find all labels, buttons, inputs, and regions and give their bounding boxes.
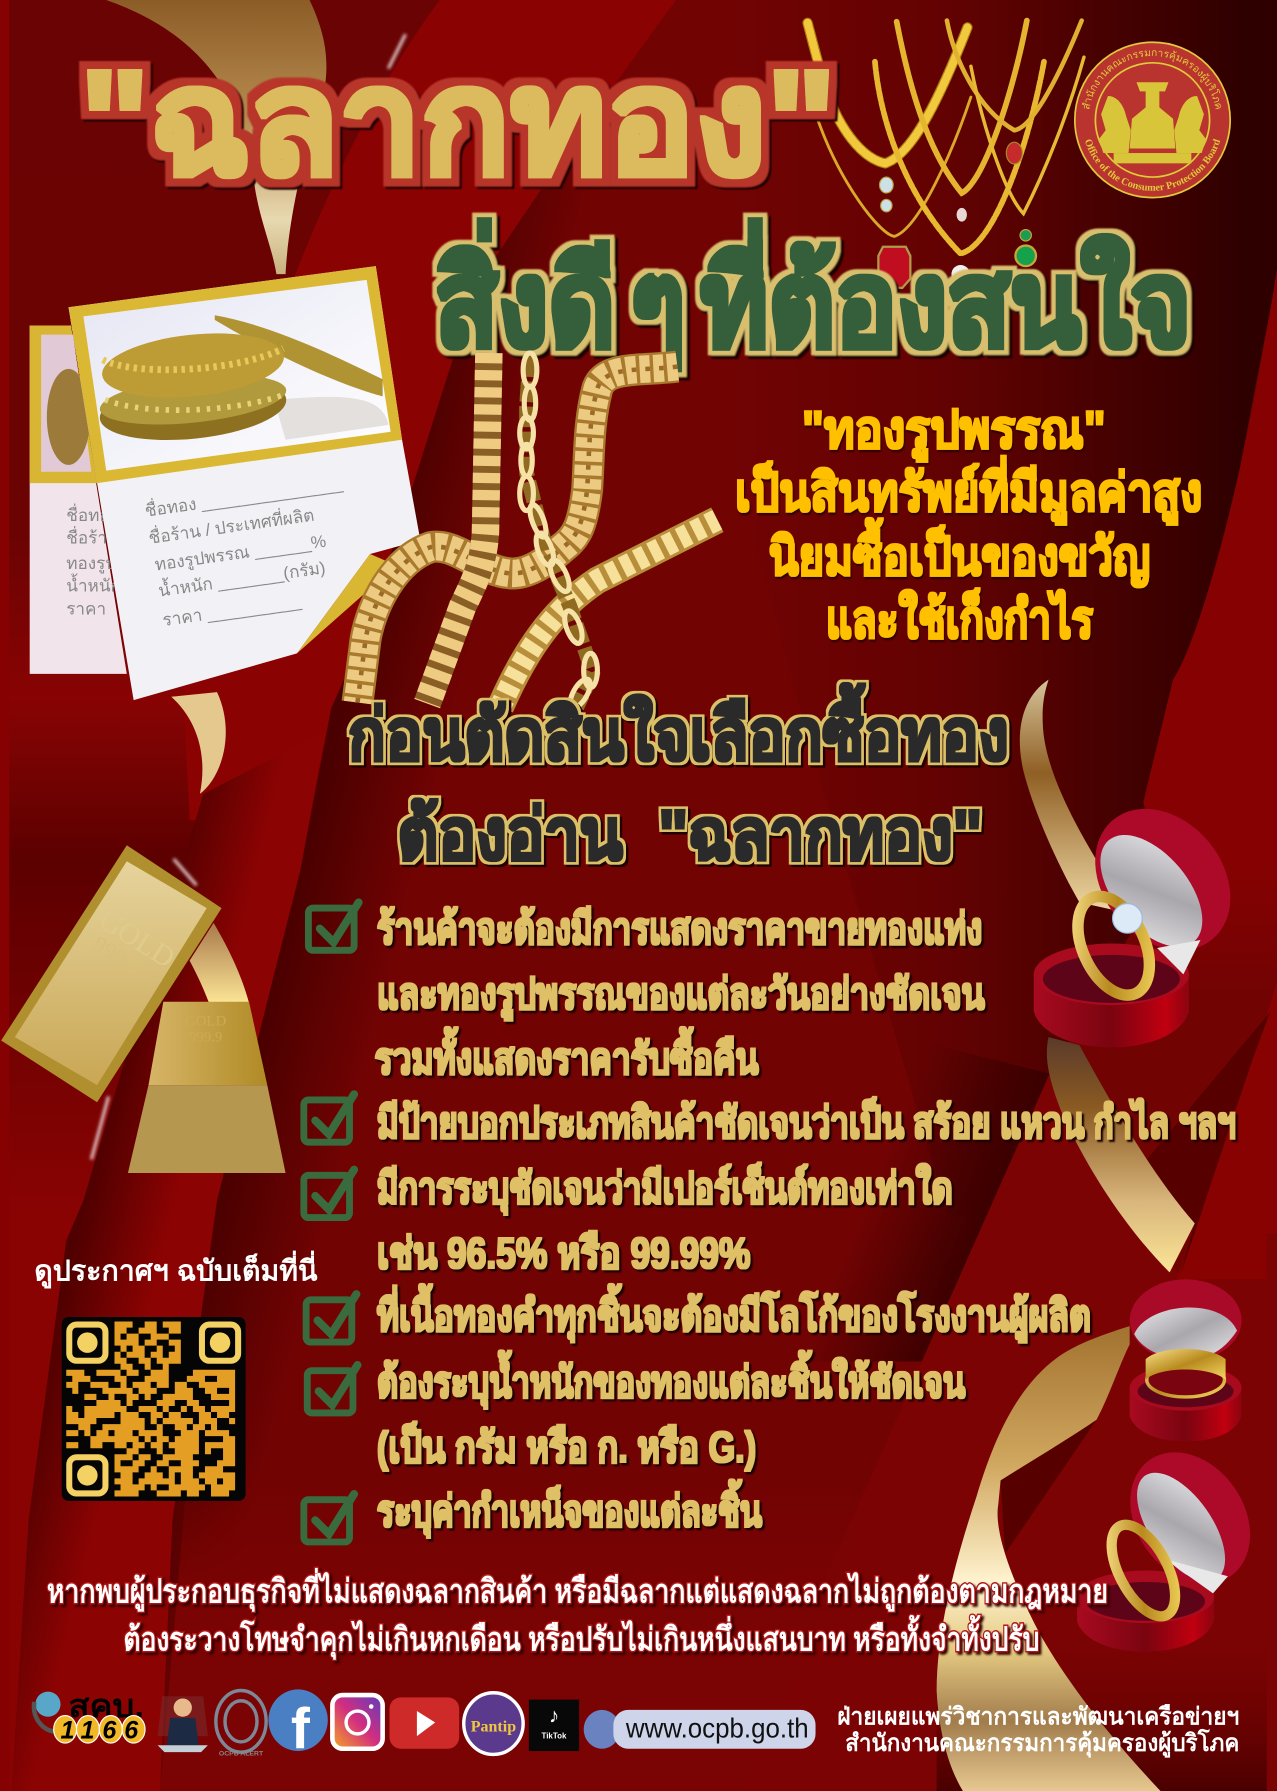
- logo: Facebook: f: [291, 1698, 311, 1762]
- logo: TikTok: [529, 1700, 579, 1751]
- form text: ชื่อร้าน / ประเทศที่ผลิต: [147, 503, 315, 548]
- check item 1: [308, 902, 359, 950]
- form text: ชื่อทอง _______________: [143, 471, 344, 521]
- info text: gold jewellery: นิยมซื้อเป็นของขวัญ: [769, 518, 1150, 588]
- necklace: pearl: [897, 21, 1027, 222]
- QR code: [62, 1317, 246, 1501]
- gold bar: standing: GOLD: [185, 1014, 226, 1030]
- form text: ทองรูปพรรณ ______%: [153, 531, 327, 576]
- QR caption: ดูประกาศฯ ฉบับเต็มที่นี่: [34, 1250, 318, 1288]
- logo: Pantip: [464, 1693, 523, 1754]
- chain: twisted rope: [427, 353, 489, 704]
- seal: consumer protection board: สำนักงานคณะกรรมการคุ้มครองผู้บริโภค: [1082, 50, 1221, 110]
- ribbon: under document: [171, 692, 226, 794]
- gold bar: tilted: GOLD: [93, 904, 180, 975]
- logo: hotline 1166: 1166: [61, 1716, 139, 1744]
- check item 2: [304, 1094, 354, 1142]
- form text: [143, 471, 360, 630]
- check item 5: [307, 1365, 358, 1413]
- document: front sheet: [69, 266, 420, 700]
- heading: before deciding: ก่อนตัดสินใจเลือกซื้อทอง: [348, 683, 1009, 776]
- logo: hotline 1166: [34, 1688, 145, 1744]
- check item 4: [306, 1294, 356, 1342]
- seal: consumer protection board: [1074, 41, 1231, 198]
- heading: before deciding: ต้องอ่าน "ฉลากทอง": [397, 796, 982, 875]
- gold bangles photo: [97, 315, 388, 448]
- logo: OCPB Alert: [216, 1690, 266, 1758]
- necklace: heavy with blue stones: [808, 23, 967, 212]
- necklace: figaro: [875, 62, 1044, 283]
- ribbon: right upper: [1020, 680, 1131, 914]
- info text: gold jewellery: "ทองรูปพรรณ": [802, 401, 1106, 463]
- logo: OCPB Alert: OCPB ALERT: [219, 1751, 264, 1758]
- document: back sheet: ชื่อทอง: [66, 503, 118, 525]
- document: back sheet: ราคา: [66, 599, 106, 619]
- checklist: รวมทั้งแสดงราคารับซื้อคืน: [375, 1027, 759, 1084]
- gold bar: standing: 999.9: [189, 1030, 222, 1046]
- footer credit: สำนักงานคณะกรรมการคุ้มครองผู้บริโภค: [845, 1728, 1239, 1758]
- info text: gold jewellery: [735, 401, 1202, 649]
- gold bar: tilted: 999.9: [89, 931, 146, 980]
- ribbon: top left gold: [106, 0, 326, 274]
- form text: ราคา __________: [161, 591, 303, 630]
- check item 6: [304, 1494, 354, 1542]
- check item 3: [304, 1170, 354, 1218]
- document: back sheet: น้ำหนัก: [66, 574, 121, 596]
- checklist: และทองรูปพรรณของแต่ละวันอย่างชัดเจน: [377, 971, 985, 1021]
- checklist: (เป็น กรัม หรือ ก. หรือ G.): [377, 1421, 756, 1472]
- logo: Pantip: Pantip: [471, 1719, 516, 1736]
- ring box 1: [1034, 782, 1258, 1047]
- gold bar: tilted: [1, 845, 222, 1102]
- checklist: ต้องระบุน้ำหนักของทองแต่ละชิ้นให้ชัดเจน: [377, 1350, 965, 1410]
- document: back sheet: ทองรูป: [66, 553, 116, 574]
- chain: scale rope: [358, 367, 677, 702]
- logo: Instagram: [332, 1695, 383, 1749]
- heading: before deciding: [348, 683, 1009, 875]
- gold bar: standing: [128, 1002, 286, 1173]
- chain: curb: [500, 520, 717, 707]
- logo: YouTube: [389, 1697, 459, 1749]
- necklace: thin with ruby: [817, 97, 971, 288]
- footer credit: ฝ่ายเผยแพร่วิชาการและพัฒนาเครือข่ายฯ: [837, 1704, 1239, 1731]
- document: back sheet: [30, 326, 127, 674]
- ribbon: behind bars: [190, 923, 249, 1003]
- necklace: ball chain with ruby: [947, 21, 1082, 164]
- penalty notice: ต้องระวางโทษจำคุกไม่เกินหกเดือน หรือปรับไม่เกินหนึ่งแสนบาท หรือทั้งจำทั้งปรับ: [123, 1615, 1039, 1661]
- ribbon: bottom right gold: [937, 1326, 1160, 1791]
- seal: consumer protection board: Office of the Consumer Protection Board: [1086, 138, 1220, 191]
- necklace: emerald: [971, 57, 1084, 266]
- ring box 3: [1077, 1429, 1275, 1652]
- form text: น้ำหนัก _______(กรัม): [157, 555, 327, 601]
- logo: cartoon officer: [158, 1696, 208, 1752]
- ring box 2: [1130, 1279, 1242, 1441]
- info text: gold jewellery: เป็นสินทรัพย์ที่มีมูลค่าสูง: [735, 456, 1202, 526]
- info text: gold jewellery: และใช้เก็งกำไร: [826, 588, 1093, 649]
- checklist: ระบุค่ากำเหน็จของแต่ละชิ้น: [377, 1479, 762, 1539]
- penalty notice: [47, 1568, 1108, 1661]
- checklist: มีการระบุชัดเจนว่ามีเปอร์เซ็นต์ทองเท่าใด: [377, 1162, 953, 1216]
- chain: link: [520, 353, 597, 711]
- logo: Facebook: [268, 1689, 328, 1762]
- checklist: [304, 902, 1236, 1542]
- checklist: เช่น 96.5% หรือ 99.99%: [377, 1230, 750, 1278]
- checklist: ร้านค้าจะต้องมีการแสดงราคาขายทองแท่ง: [377, 905, 982, 953]
- logo: website link: [584, 1710, 816, 1749]
- logo: TikTok: ♪: [549, 1704, 559, 1727]
- title: "ฉลากทอง": [80, 41, 836, 206]
- gold chains cluster: [358, 353, 717, 711]
- gold necklaces: [808, 21, 1084, 288]
- logo: website link: www.ocpb.go.th: [625, 1712, 809, 1743]
- checklist: ที่เนื้อทองคำทุกชิ้นจะต้องมีโลโก้ของโรงงานผู้ผลิต: [377, 1284, 1091, 1344]
- logo: TikTok: TikTok: [541, 1731, 567, 1740]
- document: back sheet: ชื่อร้าน: [66, 526, 119, 548]
- ribbon: right lower: [1047, 1037, 1195, 1272]
- logo: hotline 1166: สคบ.: [69, 1688, 144, 1724]
- footer credit: [837, 1704, 1239, 1758]
